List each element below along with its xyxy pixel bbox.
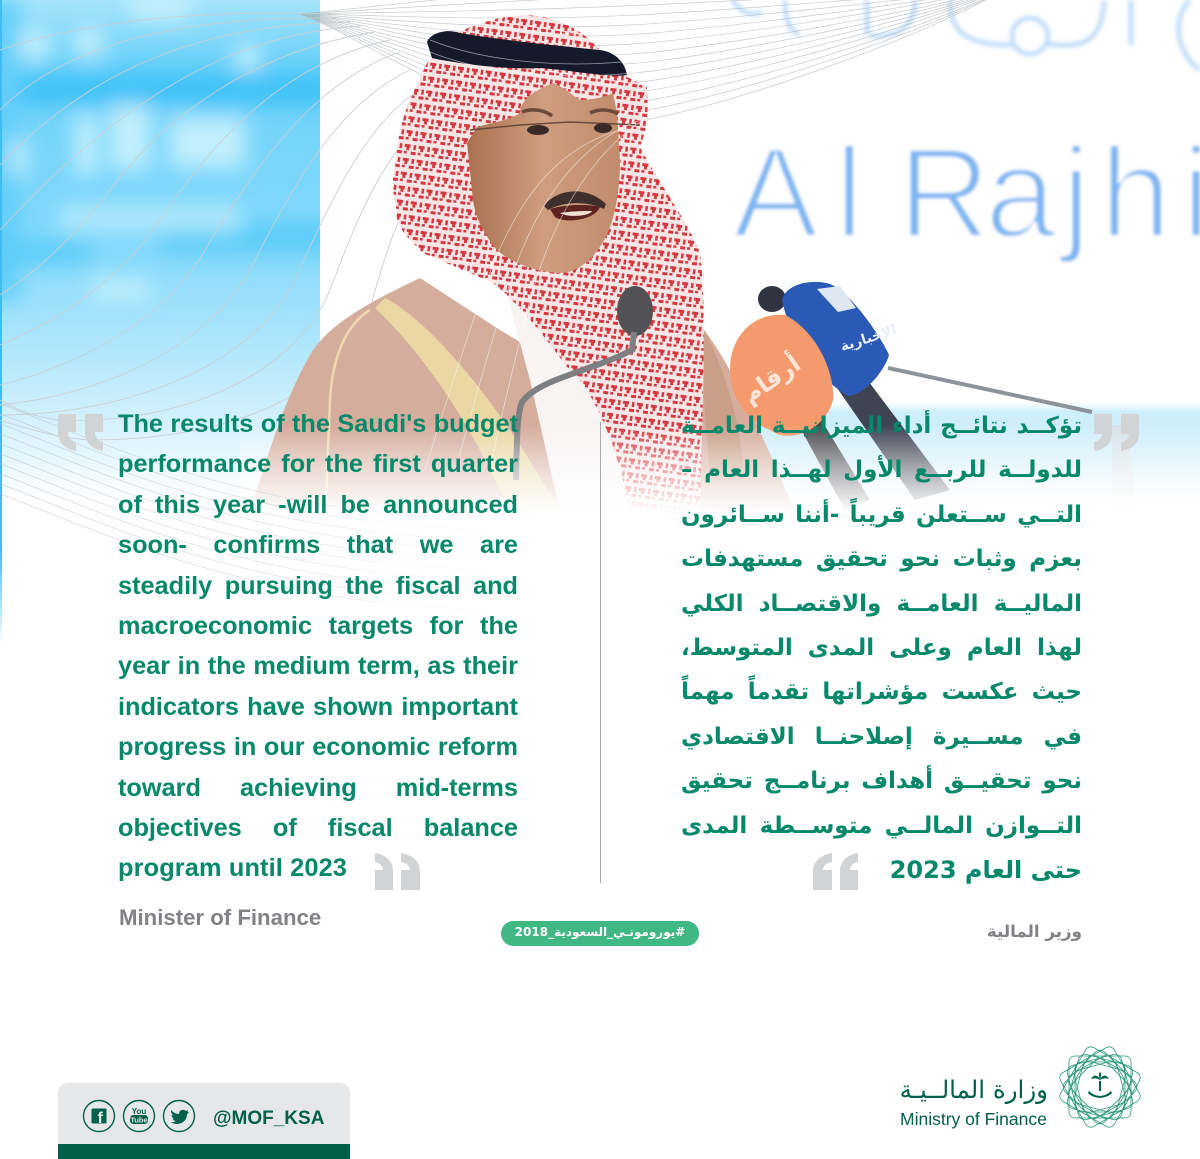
english quote text: of this year -will be announced: [118, 491, 518, 519]
arabic quote text: بعزم وثبات نحو تحقيق مستهدفات: [681, 546, 1082, 572]
arabic quote text: [681, 410, 1082, 884]
english quote text: objectives of fiscal balance: [118, 814, 518, 842]
blue blurred screen at left: [0, 0, 340, 645]
icon: facebook: [82, 1100, 116, 1132]
arabic quote text: لهذا العام وعلى المدى المتوسط،: [681, 635, 1082, 661]
arabic quote text: حتى العام 2023: [890, 856, 1082, 884]
blurred stage lettering at right: [733, 0, 1200, 265]
english quote text: indicators have shown important: [118, 693, 518, 721]
press microphones: الإخبارية: [838, 322, 899, 355]
press microphones: أرقام: [736, 348, 806, 409]
black agal: [427, 31, 627, 76]
icon: youtube: Tube: [130, 1116, 148, 1124]
icon: twitter: [162, 1100, 196, 1132]
face: [467, 83, 620, 273]
logo wordmark english: Ministry of Finance: [900, 1109, 1047, 1129]
bisht robe: [250, 278, 795, 512]
arabic quote text: التــي ســتعلن قريباً -أننا ســائرون: [681, 502, 1082, 528]
blurred stage lettering at right: Al Rajhi: [733, 122, 1200, 265]
arabic quote text: الماليــة العامــة والاقتصــاد الكلي: [681, 591, 1082, 617]
arabic quote text: للدولــة للربــع الأول لهــذا العام –: [681, 457, 1082, 483]
moustache and mouth: [544, 191, 606, 210]
glasses and eyes: [470, 110, 640, 135]
hashtag pill: [501, 921, 699, 946]
bisht inner trim line: [326, 310, 370, 500]
social media bar: [58, 1083, 350, 1159]
gold trim: [375, 298, 560, 512]
english quote text: The results of the Saudi's budget: [118, 410, 518, 438]
white thobe: [495, 250, 640, 512]
english quote text: soon- confirms that we are: [118, 531, 518, 559]
logo wordmark arabic: وزارة المالــيـة: [900, 1075, 1048, 1104]
palm and swords: [1088, 1072, 1112, 1098]
english attribution: Minister of Finance: [119, 905, 321, 930]
arabic attribution: وزير المالية: [987, 921, 1082, 941]
arabic quote text: في مســيرة إصلاحنــا الاقتصادي: [681, 724, 1082, 750]
white lines crossing the speaker: [425, 10, 660, 470]
divider: [600, 422, 601, 883]
background photo with speaker: [0, 0, 1200, 641]
arabic quote text: نحو تحقيــق أهداف برنامــج تحقيق: [681, 768, 1082, 794]
light blue band behind microphones: [640, 402, 1200, 507]
social handle: @MOF_KSA: [213, 1108, 324, 1129]
hashtag pill: #يورومونـي_السعودية_2018: [515, 925, 685, 939]
quote mark: top right: [1094, 414, 1139, 451]
microphone stand right: [888, 368, 1136, 505]
english quote text: steadily pursuing the fiscal and: [118, 572, 518, 600]
press microphones: [730, 282, 950, 510]
fine wave lines: left fan: [0, 13, 460, 440]
english quote text: macroeconomic targets for the: [118, 612, 518, 640]
fine wave lines: lower left: [0, 400, 520, 610]
bottom white fade: [240, 425, 1200, 512]
quote mark: bottom left: [375, 853, 420, 890]
speaker: [250, 15, 795, 512]
icon: youtube: You: [132, 1107, 146, 1116]
arabic quote text: حيث عكست مؤشراتها تقدماً مهماً: [681, 679, 1082, 705]
english quote text: year in the medium term, as their: [118, 652, 518, 680]
english quote text: toward achieving mid-terms: [118, 774, 518, 802]
english quote text: progress in our economic reform: [118, 733, 518, 761]
arabic quote text: تؤكــد نتائــج أداء الميزانيــة العامــة: [681, 413, 1082, 439]
shemagh head cloth: [393, 15, 704, 512]
icon: youtube: [122, 1100, 156, 1132]
quote mark: bottom right: [813, 853, 858, 890]
icon: facebook: f: [98, 1110, 104, 1127]
lectern microphone: [516, 286, 653, 480]
ministry emblem: [1059, 1046, 1141, 1128]
fine wave lines: top right: [300, 0, 990, 123]
english quote text: program until 2023: [118, 854, 347, 882]
quote mark: top left: [58, 414, 103, 451]
arabic quote text: التــوازن المالــي متوســطة المدى: [681, 813, 1082, 839]
english quote text: performance for the first quarter: [118, 450, 518, 478]
english quote text: [118, 410, 518, 882]
